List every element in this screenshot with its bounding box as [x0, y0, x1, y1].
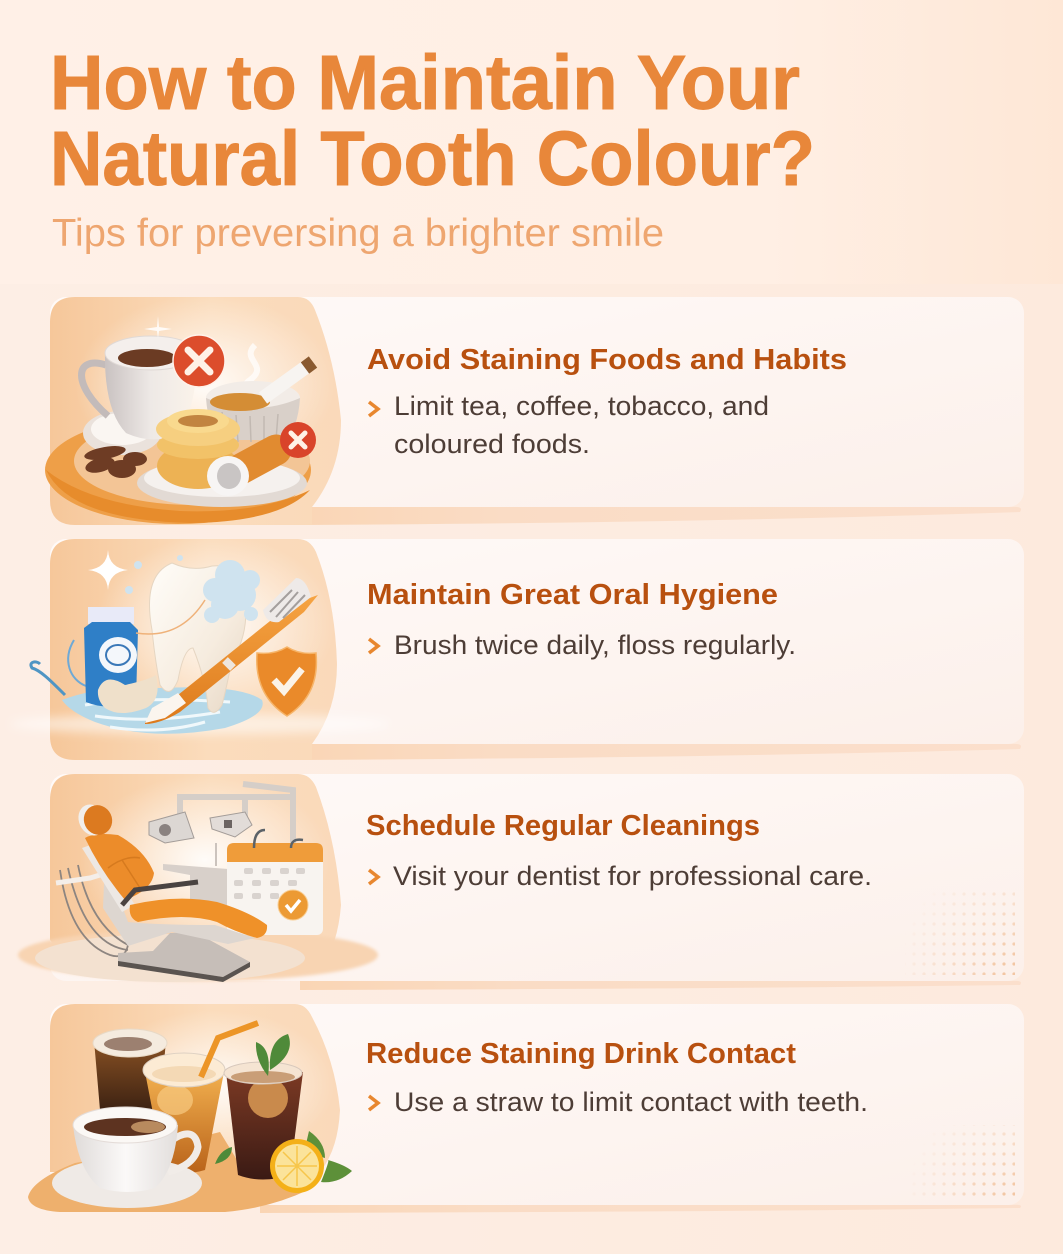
icon: tooth: [136, 563, 246, 712]
icon: calendar: [227, 830, 323, 935]
icon: mint leaves: [215, 1034, 290, 1164]
body text: Limit tea, coffee, tobacco, and: [394, 391, 769, 421]
title: How to Maintain Your: [50, 40, 800, 126]
panel: oral hygiene: [10, 535, 1024, 760]
floor inner: [35, 934, 305, 982]
heading: Reduce Staining Drink Contact: [366, 1038, 796, 1070]
heading: Schedule Regular Cleanings: [366, 810, 760, 842]
icon: coffee cup: [73, 1107, 198, 1192]
card base: [50, 1004, 1024, 1205]
card base: [50, 539, 1024, 744]
title: Natural Tooth Colour?: [50, 116, 815, 202]
panel: avoid staining foods: [45, 295, 1024, 525]
icon: side cabinet: [163, 843, 228, 905]
icon: straw: [201, 1023, 258, 1077]
body text line two: coloured foods.: [394, 429, 590, 459]
icon: food and habits: [45, 316, 313, 524]
icon: foam: [125, 555, 260, 623]
body text: Brush twice daily, floss regularly.: [394, 630, 796, 660]
card base: [50, 297, 1024, 507]
water glow: [10, 714, 390, 734]
card base: [50, 774, 1024, 981]
icon: iced coffee glass: [93, 1029, 167, 1110]
bullet arrow: [369, 639, 378, 653]
icon: dental chair: [73, 800, 267, 982]
subtitle: Tips for preversing a brighter smile: [52, 212, 664, 255]
icon: small cross badge: [280, 422, 316, 458]
illustration backdrop: [50, 1004, 340, 1172]
icon: sparkle: [88, 550, 128, 590]
table surface: [28, 1132, 308, 1212]
icon: iced tea glass: [143, 1053, 225, 1173]
bullet arrow: [369, 1096, 378, 1110]
bullet arrow: [369, 402, 378, 416]
floor ellipse: [18, 929, 378, 981]
icon: coffee saucer: [52, 1158, 202, 1208]
illustration backdrop: [50, 539, 337, 760]
icon: dental lamp arm: [149, 784, 293, 845]
body text: Use a straw to limit contact with teeth.: [394, 1087, 868, 1117]
halftone dots: [905, 890, 1015, 975]
panel: regular cleanings: [18, 774, 1024, 990]
card bottom strip: [300, 981, 1021, 990]
card bottom strip: [280, 744, 1021, 760]
glow: [95, 535, 335, 715]
glow: [95, 1010, 335, 1160]
illustration backdrop: [50, 297, 341, 525]
heading: Maintain Great Oral Hygiene: [367, 579, 778, 611]
body text: Visit your dentist for professional care.: [393, 861, 872, 891]
heading: Avoid Staining Foods and Habits: [367, 344, 847, 376]
icon: floss box: [68, 607, 138, 707]
icon: water splash: [31, 662, 263, 734]
card bottom strip: [260, 1205, 1021, 1213]
panel: reduce drink contact: [28, 1004, 1024, 1213]
icon: shield check: [257, 647, 316, 716]
glow: [75, 295, 335, 475]
glow: [80, 775, 330, 945]
card bottom strip: [280, 507, 1021, 525]
halftone dots: [922, 1125, 1015, 1196]
icon: instrument hoses: [56, 865, 128, 956]
bullet arrow: [369, 870, 378, 884]
title: [50, 40, 815, 202]
icon: cola glass: [224, 1062, 303, 1180]
icon: toothbrush: [145, 578, 318, 724]
icon: cross badge: [173, 335, 225, 387]
icon: mouth guard: [98, 675, 158, 713]
icon: lemon: [270, 1131, 352, 1193]
illustration backdrop: [50, 774, 341, 970]
